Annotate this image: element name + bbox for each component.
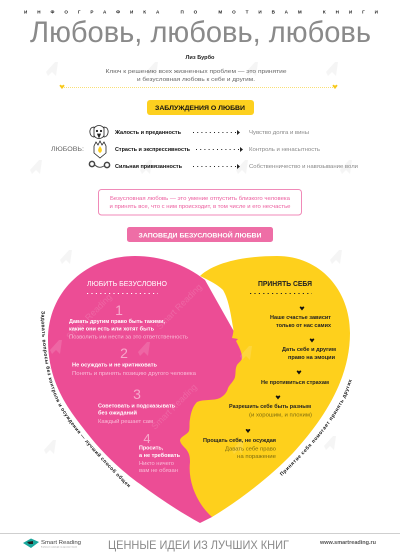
item: happiness bbox=[270, 306, 331, 329]
icon: handcuffs bbox=[89, 161, 110, 168]
item 3: без ожиданий bbox=[98, 410, 137, 416]
item 3: 3 bbox=[133, 386, 141, 402]
curved text: right: Принятие себя помогает принять других bbox=[280, 380, 352, 476]
item 1: Позволить им нести за это ответственность bbox=[69, 334, 188, 340]
background watermarks bbox=[30, 62, 352, 454]
row: pity and devotion bbox=[90, 126, 309, 138]
label: love: ЛЮБОВЬ: bbox=[51, 146, 84, 153]
footer bbox=[0, 533, 400, 552]
item 4: а не требовать bbox=[139, 452, 181, 459]
icon: flame in hands bbox=[94, 141, 106, 158]
item: happiness: только от нас самих bbox=[276, 323, 331, 329]
row: passion and expressiveness bbox=[94, 141, 320, 158]
dotted divider with hearts bbox=[60, 85, 337, 89]
heading: commandments: ЗАПОВЕДИ БЕЗУСЛОВНОЙ ЛЮБВИ bbox=[138, 230, 262, 240]
item 3 bbox=[98, 386, 176, 425]
heart bbox=[48, 256, 350, 523]
item 4: вам не обязан bbox=[139, 468, 178, 474]
curved text: left: Задавать вопросы без контроля и осуждения — лучший способ общения bbox=[40, 311, 130, 488]
watermarks on heart: Smart Reading bbox=[149, 382, 199, 431]
item 3: Каждый решает сам bbox=[98, 418, 153, 425]
tagline: ЦЕННЫЕ ИДЕИ ИЗ ЛУЧШИХ КНИГ bbox=[108, 538, 289, 552]
item: emotions: право на эмоции bbox=[288, 355, 335, 361]
item 3: Советовать и подсказывать bbox=[98, 404, 176, 410]
item: be different: Разрешить себе быть разным bbox=[229, 403, 311, 410]
subtitle: и безусловная любовь к себе и другим. bbox=[137, 77, 255, 83]
website: www.smartreading.ru bbox=[319, 540, 376, 546]
item: happiness: Наше счастье зависит bbox=[270, 315, 331, 321]
row: passion and expressiveness: Страсть и экспрессивность bbox=[115, 147, 191, 153]
heading: misconceptions bbox=[147, 100, 254, 115]
item 2: 2 bbox=[120, 345, 128, 361]
callout: definition: Безусловная любовь — это умение отпустить близкого человека bbox=[110, 196, 291, 202]
item 2 bbox=[72, 345, 196, 377]
heart: yellow half with face profile bbox=[180, 256, 350, 517]
series label: ИНФОГРАФИКА ПО МОТИВАМ КНИГИ bbox=[24, 10, 378, 14]
row: strong attachment: Собственничество и навязывание воли bbox=[249, 164, 358, 170]
row: pity and devotion: Жалость и преданность bbox=[114, 130, 182, 136]
item: forgive: на поражение bbox=[237, 454, 276, 460]
heading: commandments bbox=[127, 227, 273, 242]
item: emotions bbox=[282, 338, 336, 361]
row: pity and devotion: Чувство долга и вины bbox=[249, 130, 309, 136]
item: fears bbox=[261, 370, 329, 386]
callout: definition: и принять все, что с ним происходит, в том числе и его несчастье bbox=[110, 204, 290, 210]
watermarks on heart: Smart Reading bbox=[154, 282, 204, 331]
subtitle bbox=[106, 69, 286, 83]
heading: misconceptions: ЗАБЛУЖДЕНИЯ О ЛЮБВИ bbox=[155, 105, 245, 112]
row: passion and expressiveness: Контроль и ненасытность bbox=[249, 147, 320, 153]
title: Любовь, любовь, любовь bbox=[30, 16, 371, 49]
item: fears: Не противиться страхам bbox=[261, 380, 329, 386]
row: strong attachment bbox=[89, 161, 358, 170]
callout: definition bbox=[98, 190, 302, 215]
watermarks on heart: Smart Reading bbox=[64, 292, 114, 341]
panel: love unconditionally bbox=[69, 281, 196, 474]
subtitle: Ключ к решению всех жизненных проблем — это принятие bbox=[106, 69, 286, 75]
panel: accept yourself bbox=[203, 281, 336, 460]
item: be different bbox=[229, 395, 312, 418]
item: forgive: Давать себе право bbox=[225, 446, 276, 452]
item 2: Понять и принять позицию другого человека bbox=[72, 371, 196, 377]
item 2: Не осуждать и не критиковать bbox=[72, 362, 158, 368]
item 1: какие они есть или хотят быть bbox=[69, 326, 155, 332]
item 1: Давать другим право быть такими, bbox=[69, 318, 165, 325]
item 1 bbox=[69, 302, 188, 340]
watermarks on heart bbox=[50, 282, 252, 454]
item 4: Просить, bbox=[139, 446, 164, 452]
logo: Smart Reading: Книжные саммари на русском языке bbox=[41, 546, 78, 548]
item: forgive bbox=[203, 429, 276, 460]
item 1: 1 bbox=[115, 302, 123, 318]
item: forgive: Прощать себя, не осуждая bbox=[203, 437, 276, 444]
heading: love unconditionally: ЛЮБИТЬ БЕЗУСЛОВНО bbox=[87, 281, 168, 288]
item 4: Никто ничего bbox=[139, 461, 174, 467]
logo: Smart Reading bbox=[23, 538, 81, 548]
item 4 bbox=[139, 431, 181, 474]
heading: accept yourself: ПРИНЯТЬ СЕБЯ bbox=[258, 281, 312, 288]
author: Лиз Бурбо bbox=[186, 54, 215, 61]
row: strong attachment: Сильная привязанность bbox=[115, 164, 183, 170]
heart: pink half bbox=[48, 256, 250, 523]
item: emotions: Дать себе и другим bbox=[282, 346, 336, 353]
item 4: 4 bbox=[143, 431, 151, 446]
logo: Smart Reading: Smart Reading bbox=[41, 540, 81, 546]
icon: dog bbox=[90, 126, 108, 138]
item: be different: (и хорошим, и плохим) bbox=[249, 412, 312, 418]
